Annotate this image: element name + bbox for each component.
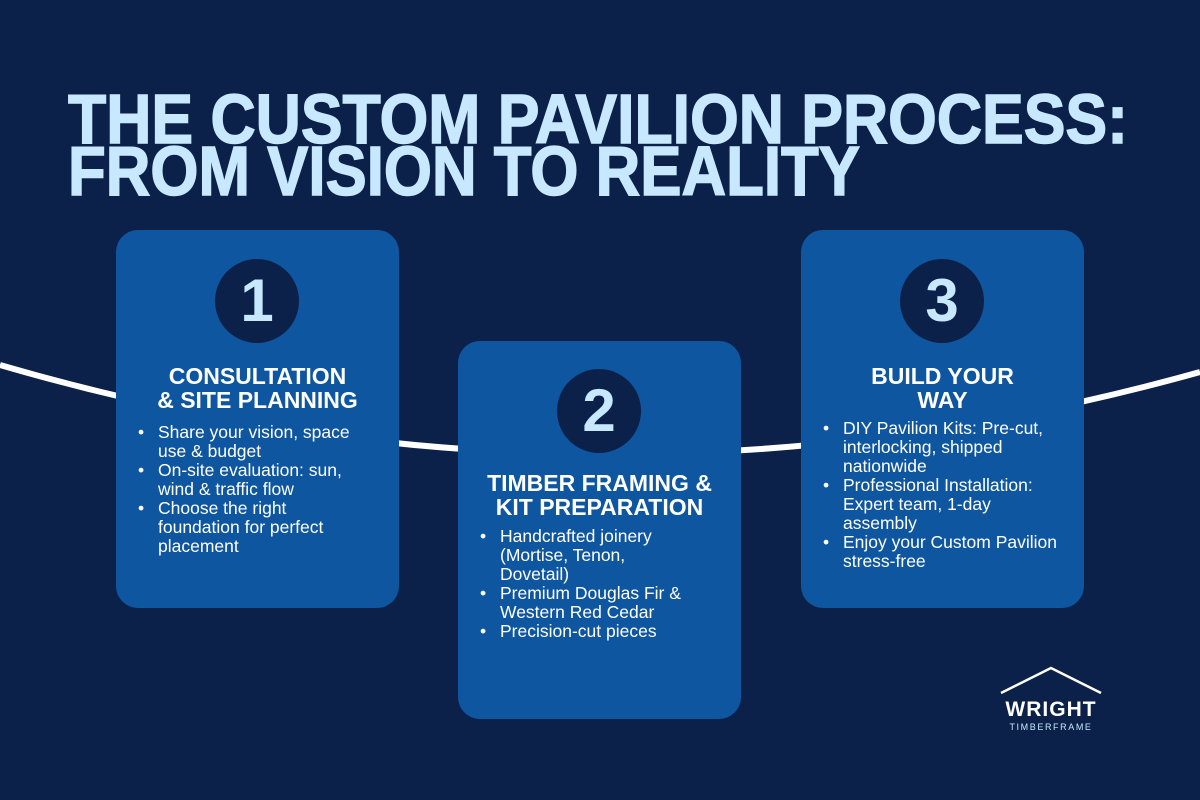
logo: WRIGHT [1005,698,1097,721]
bullets 1: foundation for perfect [158,517,323,537]
heading 1: & SITE PLANNING [157,387,358,413]
bullets 3: interlocking, shipped [843,437,1003,457]
heading 2: TIMBER FRAMING & [487,470,712,496]
bullets 3: Enjoy your Custom Pavilion [843,532,1057,552]
bullets 2: Precision-cut pieces [500,621,657,641]
heading 1 [157,363,358,413]
title [68,80,1128,210]
bullets 3: stress-free [843,551,926,571]
bullets 3: Professional Installation: [843,475,1033,495]
bullets 3: DIY Pavilion Kits: Pre-cut, [843,418,1043,438]
number 3 [900,259,984,343]
bullets 2: Handcrafted joinery [500,526,652,546]
heading 1: CONSULTATION [169,363,346,389]
heading 3: WAY [917,387,968,413]
bullets 2: Western Red Cedar [500,602,654,622]
title: FROM VISION TO REALITY [68,132,860,210]
bullets 3 [824,418,1057,571]
bullets 2: (Mortise, Tenon, [500,545,625,565]
bullets 1: use & budget [158,441,261,461]
bullets 1: placement [158,536,239,556]
logo [1000,666,1102,732]
bullets 2: Dovetail) [500,564,569,584]
bullets 3: nationwide [843,456,927,476]
bullets 1: Share your vision, space [158,422,350,442]
bullets 3: assembly [843,513,917,533]
heading 3 [871,363,1014,413]
bullets 3: Expert team, 1-day [843,494,991,514]
bullets 1 [138,422,350,556]
heading 2: KIT PREPARATION [496,494,703,520]
bullets 2: Premium Douglas Fir & [500,583,681,603]
panel: step 3 [801,230,1084,608]
number 1 [215,259,299,343]
panel: step 2 [458,341,741,719]
bullets 1: wind & traffic flow [158,479,294,499]
bullets 2 [480,526,681,641]
heading 2 [487,470,712,520]
panel: step 1 [116,230,399,608]
number 1: 1 [240,267,274,334]
number 2: 2 [582,377,616,444]
logo: TIMBERFRAME [1009,722,1093,732]
number 2 [557,369,641,453]
number 3: 3 [925,267,959,334]
heading 3: BUILD YOUR [871,363,1014,389]
bullets 1: Choose the right [158,498,286,518]
bullets 1: On-site evaluation: sun, [158,460,342,480]
